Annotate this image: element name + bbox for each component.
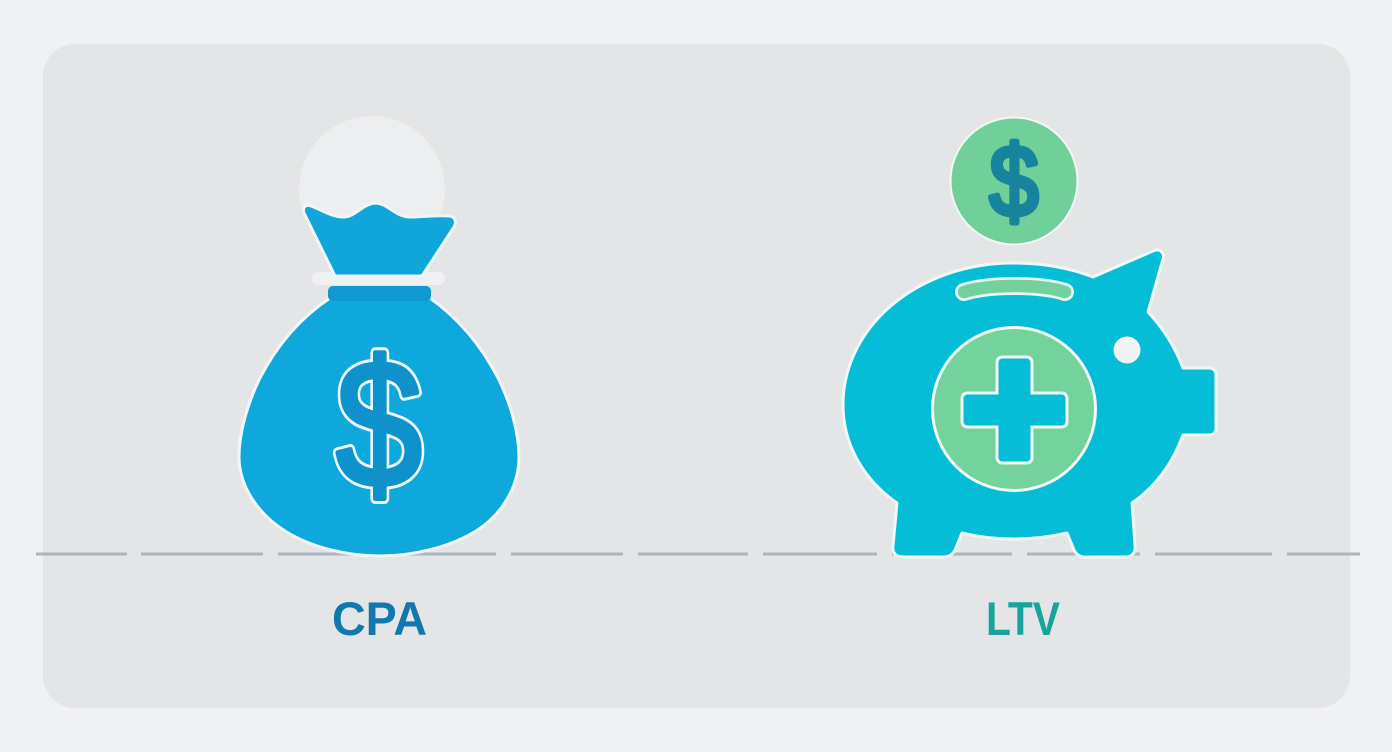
green circle	[932, 328, 1096, 490]
bag top	[303, 203, 455, 276]
plus sign	[962, 357, 1067, 463]
icon: money bag	[239, 116, 519, 556]
dollar sign on bag: $	[336, 323, 422, 525]
coin slot	[964, 286, 1065, 292]
label: CPA: CPA	[332, 592, 427, 645]
label: LTV: LTV	[986, 592, 1061, 645]
bag neck band	[328, 286, 431, 301]
pig eye	[1114, 336, 1140, 364]
coin dollar sign: $	[990, 125, 1038, 237]
dollar sign on bag: $	[336, 323, 422, 525]
icon: piggy bank	[843, 250, 1216, 557]
bag body	[239, 298, 519, 556]
icon: falling coin	[950, 118, 1078, 244]
pig body	[843, 250, 1216, 557]
ghost coin behind bag	[299, 116, 445, 262]
tie ring	[312, 272, 445, 285]
